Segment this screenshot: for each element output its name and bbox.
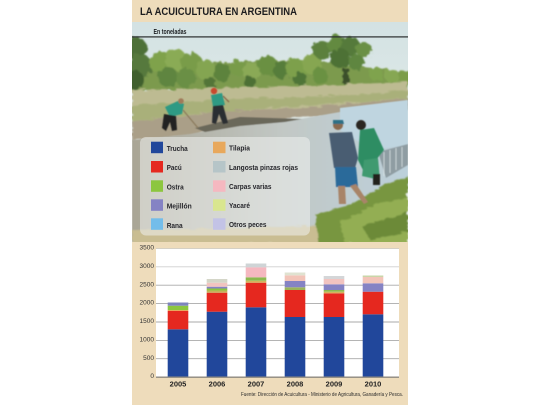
y axis labels: 500 — [143, 355, 154, 362]
legend item: Otros peces — [213, 218, 266, 230]
figure: worker right — [211, 88, 229, 124]
legend item: Langosta pinzas rojas: Langosta pinzas rojas — [229, 163, 298, 172]
legend item: Carpas varias — [213, 180, 272, 192]
y axis labels: 2500 — [140, 282, 154, 288]
bar: 2005 — [168, 302, 188, 377]
x axis labels: 2008 — [287, 380, 303, 388]
legend item: Yacaré — [213, 199, 250, 211]
bar: 2008 — [285, 272, 305, 377]
x axis labels: 2006 — [209, 380, 225, 388]
y axis labels — [140, 244, 154, 380]
photo: fish farm workers at pond — [124, 22, 413, 244]
legend item: Langosta pinzas rojas — [213, 161, 298, 172]
y axis labels: 1000 — [140, 336, 154, 344]
legend panel — [140, 137, 310, 236]
legend item: Tilapia: Tilapia — [229, 144, 251, 152]
legend item: Carpas varias: Carpas varias — [229, 182, 272, 191]
source note: Fuente: Dirección de Acuicultura - Ministerio de Agricultura, Ganadería y Pesca. — [241, 392, 403, 398]
x axis labels — [170, 380, 381, 388]
legend item: Mejillón: Mejillón — [167, 202, 192, 210]
y axis labels: 1500 — [140, 318, 154, 325]
figure: men holding the net — [329, 120, 384, 204]
figure: worker left — [162, 98, 198, 131]
y axis labels: 0 — [150, 373, 154, 380]
legend item: Tilapia — [213, 142, 251, 153]
legend item: Pacú: Pacú — [167, 163, 182, 172]
legend item: Trucha — [151, 142, 188, 153]
legend item: Ostra — [151, 180, 184, 192]
legend item: Rana — [151, 218, 183, 230]
subtitle: En toneladas: En toneladas — [154, 29, 187, 36]
bar: 2009 — [324, 276, 344, 377]
legend item: Mejillón — [151, 199, 192, 211]
bar: 2006 — [207, 279, 227, 377]
legend item: Otros peces: Otros peces — [229, 220, 266, 229]
y axis labels: 3000 — [140, 263, 154, 270]
legend item: Trucha: Trucha — [167, 144, 188, 153]
legend item: Ostra: Ostra — [167, 182, 184, 192]
legend item: Rana: Rana — [167, 221, 183, 230]
bar chart: tonnes by year — [140, 244, 399, 388]
x axis labels: 2010 — [365, 380, 381, 388]
x axis labels: 2007 — [248, 380, 264, 388]
title: LA ACUICULTURA EN ARGENTINA — [140, 6, 297, 18]
x axis labels: 2009 — [326, 380, 342, 388]
x axis labels: 2005 — [170, 380, 186, 388]
legend item: Yacaré: Yacaré — [229, 201, 250, 210]
bar: 2007 — [246, 264, 266, 377]
y axis labels: 2000 — [140, 300, 154, 306]
panel: cream background — [132, 0, 408, 405]
bar: 2010 — [363, 276, 383, 377]
legend item: Pacú — [151, 161, 182, 172]
y axis labels: 3500 — [140, 244, 154, 252]
